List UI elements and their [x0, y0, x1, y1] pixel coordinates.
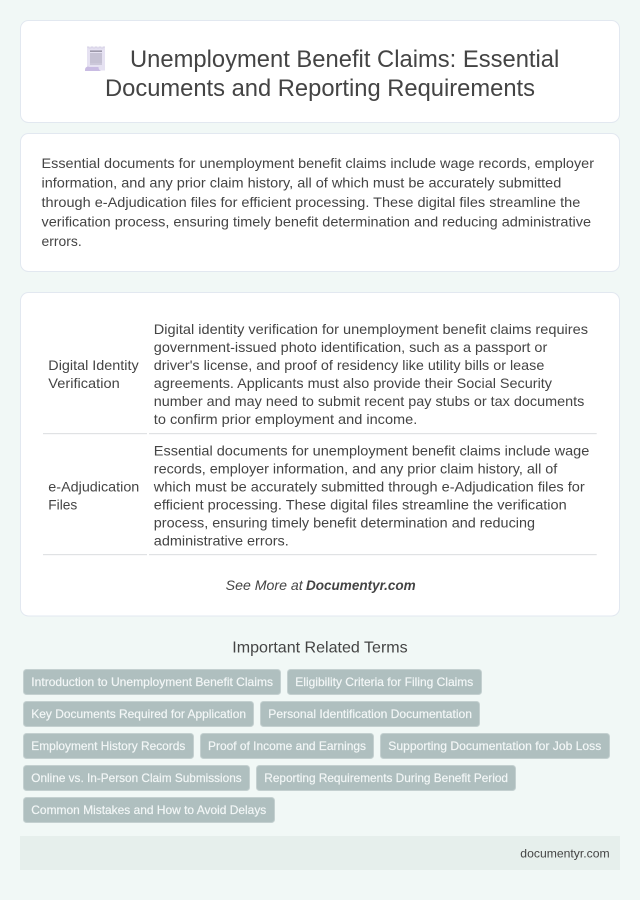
icon: scroll document	[85, 47, 105, 71]
tag	[24, 734, 194, 758]
tag	[24, 766, 250, 790]
text block: summary: information, and any prior claim history, all of which must be accurately submitted	[42, 174, 561, 190]
panel: title card	[20, 20, 620, 122]
tag: Reporting Requirements During Benefit Period	[264, 771, 508, 785]
table row: Digital Identity Verification: driver's license, and proof of residency like utility bills or lease	[154, 357, 545, 373]
tag: Common Mistakes and How to Avoid Delays	[31, 803, 266, 817]
footer	[20, 836, 620, 870]
tag	[24, 670, 280, 694]
tag	[288, 670, 482, 694]
tag: Online vs. In-Person Claim Submissions	[31, 771, 242, 785]
table row: Digital Identity Verification	[48, 321, 588, 427]
tag	[200, 734, 374, 758]
table row: Digital Identity Verification: number and may need to submit recent pay stubs or tax documents	[154, 393, 584, 409]
text block: summary: Essential documents for unemployment benefit claims include wage records, employer	[42, 155, 594, 171]
tag	[24, 702, 254, 726]
tag	[260, 702, 480, 726]
link: see more: See More at	[226, 577, 304, 593]
table row: Digital Identity Verification: Digital Identity	[48, 357, 139, 373]
table row: Digital Identity Verification: government-issued photo identification, such as a passport or	[154, 339, 548, 355]
tag	[24, 798, 274, 822]
table row: e-Adjudication Files: e-Adjudication	[48, 478, 139, 494]
tag: Employment History Records	[31, 739, 185, 753]
link: see more	[226, 577, 416, 593]
tag: Key Documents Required for Application	[31, 707, 246, 721]
panel: document table	[20, 292, 620, 616]
table row: Digital Identity Verification: Verification	[48, 375, 120, 391]
table row: e-Adjudication Files: which must be accurately submitted through e-Adjudication files for	[153, 478, 585, 494]
table row: e-Adjudication Files: Essential documents for unemployment benefit claims include wage	[154, 442, 590, 458]
footer: documentyr.com	[520, 846, 610, 860]
tag	[256, 766, 516, 790]
text block: summary: errors.	[42, 233, 82, 249]
panel: summary paragraph	[20, 134, 620, 272]
table row: e-Adjudication Files: administrative errors.	[154, 532, 289, 548]
table row: Digital Identity Verification: to confirm prior employment and income.	[154, 411, 417, 427]
table row: Digital Identity Verification: Digital identity verification for unemployment benefit claims requires	[154, 321, 588, 337]
heading: related terms: Important Related Terms	[232, 639, 408, 656]
tag	[380, 734, 610, 758]
title	[105, 46, 559, 102]
table row: e-Adjudication Files: Files	[48, 496, 77, 512]
title: Documents and Reporting Requirements	[105, 75, 535, 102]
text block: summary: through e-Adjudication files for efficient processing. These digital files streamline the	[42, 194, 581, 210]
link: see more: Documentyr.com	[306, 577, 416, 593]
tag: Supporting Documentation for Job Loss	[388, 739, 601, 753]
tag list: related terms	[24, 670, 610, 822]
table row: e-Adjudication Files	[48, 442, 590, 548]
table row: e-Adjudication Files: efficient processing. These digital files streamline the verification	[154, 496, 567, 512]
tag: Personal Identification Documentation	[268, 707, 472, 721]
tag: Introduction to Unemployment Benefit Claims	[31, 675, 273, 689]
tag: Eligibility Criteria for Filing Claims	[295, 675, 473, 689]
text block: summary: verification process, ensuring timely benefit determination and reducing administrative	[42, 214, 591, 230]
tag: Proof of Income and Earnings	[208, 739, 366, 753]
text block: summary	[42, 155, 594, 249]
table row: e-Adjudication Files: records, employer information, and any prior claim history, all of	[154, 460, 557, 476]
title: Unemployment Benefit Claims: Essential	[130, 46, 559, 73]
table row: Digital Identity Verification: agreements. Applicants must also provide their Social Security	[154, 375, 552, 391]
table row: e-Adjudication Files: process, ensuring timely benefit determination and reducing	[154, 514, 535, 530]
